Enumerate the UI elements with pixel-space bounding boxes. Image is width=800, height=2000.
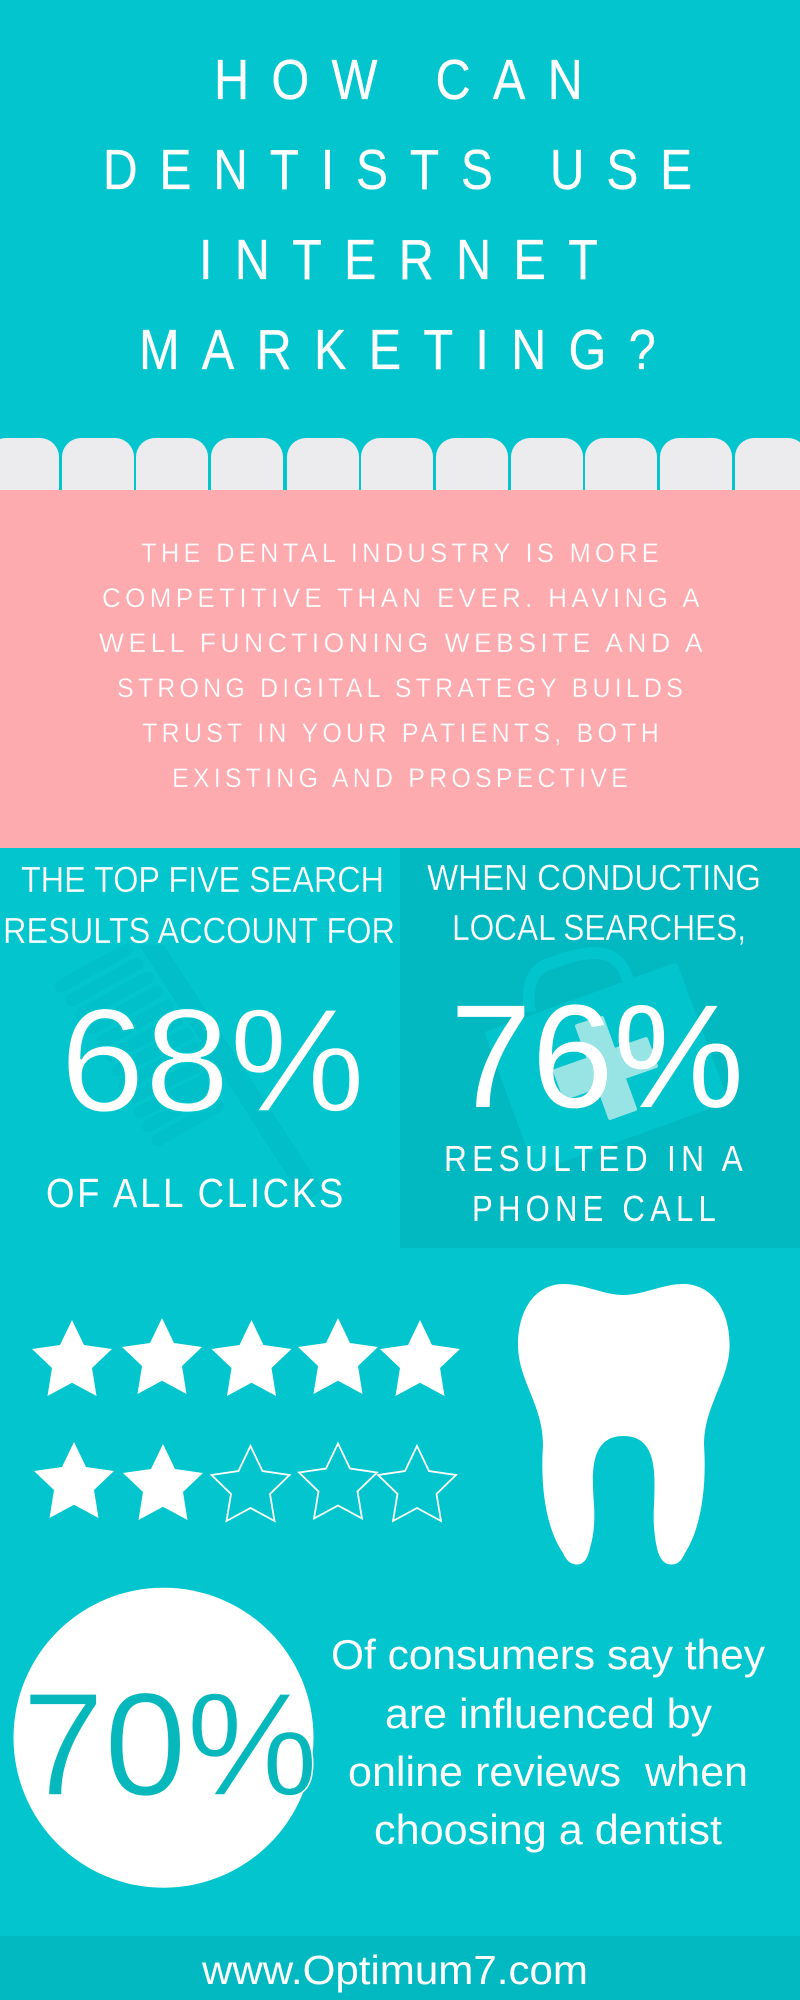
reviews text — [331, 1631, 765, 1853]
stat caption: PHONE CALL — [472, 1188, 721, 1229]
stat number 70%: 70% — [22, 1663, 318, 1827]
intro text: THE DENTAL INDUSTRY IS MORE — [141, 538, 663, 568]
stat caption: OF ALL CLICKS — [46, 1170, 346, 1216]
reviews text: online reviews when — [348, 1748, 748, 1795]
stat lead-in: THE TOP FIVE SEARCH — [21, 859, 384, 900]
stat number 76%: 76% — [450, 975, 744, 1139]
intro text: EXISTING AND PROSPECTIVE — [172, 763, 632, 793]
stat lead-in: WHEN CONDUCTING — [427, 857, 761, 898]
intro text — [99, 538, 707, 793]
reviews text: are influenced by — [385, 1690, 712, 1737]
title — [103, 48, 714, 382]
intro text: WELL FUNCTIONING WEBSITE AND A — [99, 628, 707, 658]
stat: 68% of all clicks — [3, 859, 395, 1216]
stat number 68%: 68% — [60, 979, 365, 1143]
row of teeth — [0, 438, 800, 490]
stat lead-in: RESULTS ACCOUNT FOR — [3, 910, 395, 951]
website url: www.Optimum7.com — [201, 1947, 588, 1993]
stat: 76% phone call — [427, 857, 761, 1229]
icon: two of five stars — [34, 1442, 456, 1521]
icon: five filled stars — [32, 1318, 460, 1396]
reviews text: Of consumers say they — [331, 1631, 765, 1678]
stat lead-in — [427, 857, 761, 948]
stat lead-in — [3, 859, 395, 951]
footer band — [0, 1936, 800, 2000]
panel: intro — [0, 490, 800, 848]
intro text: TRUST IN YOUR PATIENTS, BOTH — [142, 718, 663, 748]
panel: right stat background — [400, 848, 800, 1248]
title: HOW CAN — [214, 48, 605, 112]
icon: medical bag watermark — [488, 953, 725, 1168]
stat caption: RESULTED IN A — [444, 1138, 748, 1179]
stat lead-in: LOCAL SEARCHES, — [452, 907, 746, 948]
intro text: STRONG DIGITAL STRATEGY BUILDS — [117, 673, 687, 703]
icon: toothbrush watermark — [61, 945, 322, 1202]
title: INTERNET — [199, 228, 620, 292]
title: MARKETING? — [139, 318, 678, 382]
stat caption — [444, 1138, 748, 1229]
reviews text: choosing a dentist — [374, 1806, 722, 1853]
intro text: COMPETITIVE THAN EVER. HAVING A — [102, 583, 704, 613]
stat: 70% circle — [14, 1588, 318, 1888]
icon: tooth — [518, 1284, 730, 1564]
